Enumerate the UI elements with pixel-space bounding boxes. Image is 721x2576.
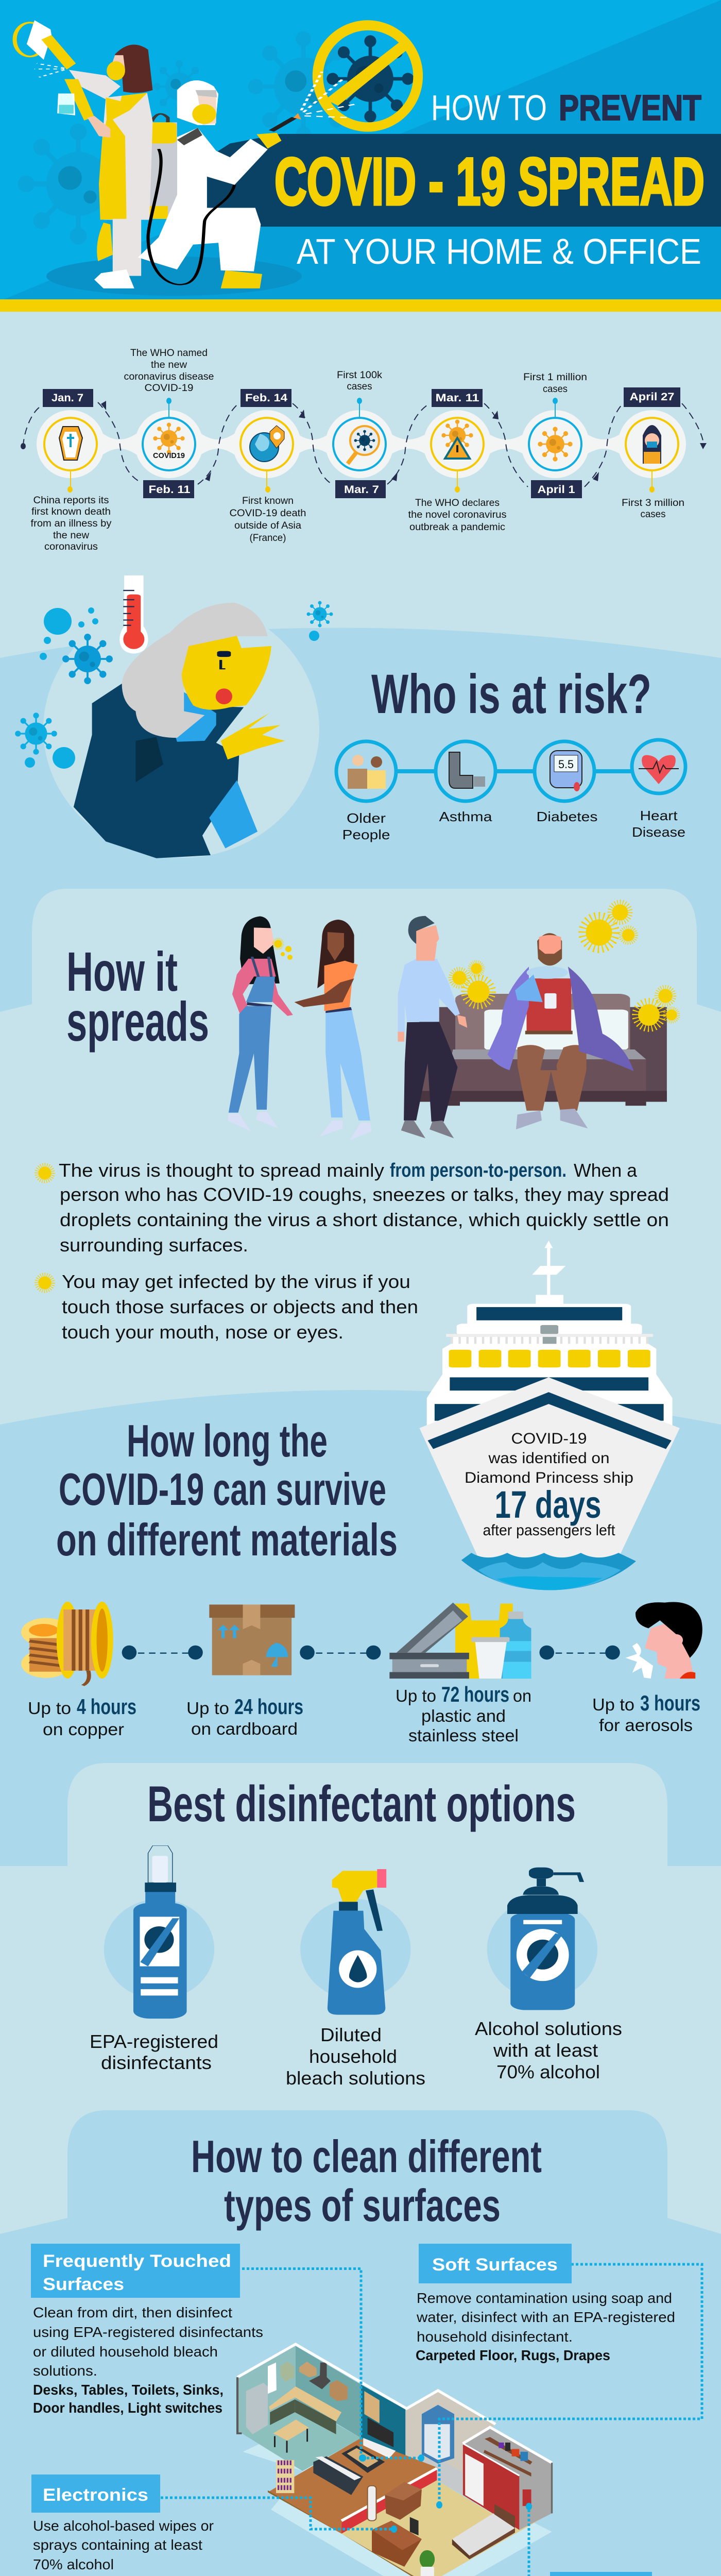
icon: covid19 virus: COVID19 bbox=[153, 451, 185, 460]
date labels: Jan. 7 bbox=[52, 392, 83, 404]
materials row text: Up to bbox=[28, 1699, 71, 1718]
event descriptions: First 100k bbox=[337, 370, 383, 381]
icon: inhaler bbox=[436, 741, 495, 801]
materials row text: 72 hours bbox=[441, 1682, 509, 1706]
event descriptions: first known death bbox=[31, 506, 111, 517]
event descriptions: cases bbox=[347, 381, 372, 392]
timeline ribbon bbox=[37, 410, 686, 478]
risk labels bbox=[342, 808, 685, 842]
date labels: Mar. 7 bbox=[344, 484, 379, 496]
materials row text: 4 hours bbox=[77, 1694, 136, 1719]
icon: coffin bbox=[59, 427, 82, 460]
callout: electronics bbox=[31, 2475, 245, 2576]
callout: electronics: Electronics bbox=[43, 2485, 148, 2505]
paragraph: spread from person to person: person who has COVID-19 coughs, sneezes or talks, they may spread bbox=[60, 1184, 669, 1205]
paragraph: touching surfaces: touch your mouth, nose or eyes. bbox=[62, 1321, 344, 1343]
illustration: people and sofa bbox=[228, 916, 667, 1140]
ship text: 17 days bbox=[494, 1483, 602, 1526]
disinfectant labels: 70% alcohol bbox=[496, 2061, 600, 2082]
callout: electronics: Use alcohol-based wipes or bbox=[33, 2518, 214, 2534]
event descriptions: COVID-19 bbox=[144, 383, 194, 394]
event descriptions: the new bbox=[151, 360, 187, 370]
date labels: Feb. 11 bbox=[148, 484, 191, 496]
materials row text: 3 hours bbox=[640, 1691, 700, 1715]
heading: how to clean: types of surfaces bbox=[224, 2180, 501, 2231]
event descriptions: the new bbox=[53, 530, 89, 541]
man standing with cap bbox=[398, 916, 467, 1138]
callout: frequently touched surfaces: Clean from dirt, then disinfect bbox=[33, 2304, 232, 2320]
disinfectant labels: Diluted bbox=[320, 2024, 382, 2045]
callout: electronics: sprays containing at least bbox=[33, 2537, 202, 2553]
date labels: Mar. 11 bbox=[436, 392, 479, 404]
disinfectant labels: disinfectants bbox=[101, 2052, 212, 2073]
event descriptions: First 3 million bbox=[622, 498, 684, 509]
icon: person sneezing bbox=[625, 1602, 702, 1679]
heading: how long: COVID-19 can survive bbox=[59, 1464, 386, 1515]
date labels: April 1 bbox=[538, 484, 575, 496]
materials row text: on copper bbox=[43, 1720, 124, 1739]
woman in overalls bbox=[228, 917, 293, 1131]
event descriptions: (France) bbox=[249, 533, 286, 544]
heading: how to clean: How to clean different bbox=[191, 2131, 542, 2182]
connectors bbox=[122, 1646, 620, 1659]
materials row text bbox=[28, 1682, 700, 1745]
illustration: disinfectant bottles bbox=[104, 1845, 597, 2019]
ship text: COVID-19 bbox=[511, 1430, 587, 1447]
icon: magnifier bbox=[348, 426, 379, 464]
disinfectant labels: Alcohol solutions bbox=[475, 2018, 622, 2039]
materials row text: stainless steel bbox=[408, 1726, 519, 1745]
event descriptions: China reports its bbox=[33, 495, 109, 506]
event descriptions bbox=[31, 348, 684, 552]
rings and stems bbox=[44, 398, 678, 493]
paragraph: spread from person to person: from person-to-person. bbox=[390, 1160, 566, 1181]
woman wiping bbox=[15, 20, 152, 289]
callout: laundry bbox=[409, 2572, 707, 2576]
risk labels: Disease bbox=[632, 824, 685, 840]
icon: woman with mask bbox=[643, 425, 661, 464]
date labels: Feb. 14 bbox=[245, 392, 287, 404]
callout: electronics: 70% alcohol bbox=[33, 2556, 114, 2572]
risk labels: People bbox=[342, 827, 390, 842]
heading: how it spreads bbox=[66, 940, 209, 1053]
callout: frequently touched surfaces: Frequently Touched bbox=[43, 2251, 231, 2271]
callout: frequently touched surfaces: Desks, Tables, Toilets, Sinks, bbox=[33, 2382, 224, 2398]
sanitizing workers illustration bbox=[15, 20, 356, 289]
callout: soft surfaces: Soft Surfaces bbox=[432, 2255, 558, 2275]
heading: how to clean bbox=[191, 2131, 542, 2231]
event descriptions: outbreak a pandemic bbox=[409, 522, 505, 533]
callout connector lines bbox=[161, 2264, 702, 2576]
kneeling man in protective suit bbox=[138, 72, 356, 289]
woman in orange shirt bbox=[295, 920, 372, 1140]
materials row text: on cardboard bbox=[191, 1719, 298, 1738]
icon: glucose meter bbox=[535, 741, 594, 801]
title: how to prevent bbox=[431, 88, 701, 128]
materials row text: Up to bbox=[592, 1695, 634, 1714]
bottle: diluted bleach bbox=[328, 1869, 386, 2015]
risk labels: Diabetes bbox=[537, 809, 597, 824]
callout: soft surfaces: Carpeted Floor, Rugs, Drapes bbox=[416, 2347, 610, 2363]
event descriptions: the novel coronavirus bbox=[408, 510, 507, 520]
date boxes bbox=[43, 387, 680, 498]
event descriptions: coronavirus disease bbox=[124, 371, 214, 382]
callout: frequently touched surfaces: using EPA-registered disinfectants bbox=[33, 2324, 263, 2340]
icon: heart bbox=[632, 740, 685, 793]
illustration: cruise ship bbox=[419, 1241, 680, 1558]
materials row text: Up to bbox=[186, 1699, 229, 1718]
yellow virus particles bbox=[273, 902, 678, 1029]
disinfectant labels: with at least bbox=[493, 2040, 598, 2061]
event descriptions: cases bbox=[543, 384, 568, 395]
bottle: alcohol pump bbox=[507, 1868, 584, 2010]
callout: frequently touched surfaces: Surfaces bbox=[43, 2275, 124, 2294]
heading: how it spreads: spreads bbox=[66, 990, 209, 1053]
icon: orange virus bbox=[538, 427, 573, 462]
disinfectant labels: EPA-registered bbox=[90, 2031, 218, 2052]
ship text: was identified on bbox=[488, 1450, 610, 1467]
disinfectant labels: household bbox=[309, 2046, 397, 2067]
event descriptions: First 1 million bbox=[523, 372, 587, 383]
icon: globe and skull bbox=[250, 426, 284, 462]
timeline bbox=[21, 348, 707, 552]
how it spreads section bbox=[37, 902, 678, 1343]
event descriptions: First known bbox=[242, 496, 294, 506]
event descriptions: outside of Asia bbox=[234, 520, 301, 531]
paragraph: touching surfaces bbox=[37, 1271, 418, 1343]
bottle: EPA disinfectant bbox=[133, 1845, 187, 2019]
paragraph: spread from person to person: When a bbox=[574, 1160, 638, 1181]
icon: thermometer bbox=[119, 575, 148, 654]
event descriptions: cases bbox=[641, 509, 665, 520]
icon: covid19 virus bbox=[153, 422, 185, 460]
disinfectant labels bbox=[90, 2018, 622, 2089]
paragraph: touching surfaces: touch those surfaces or objects and then bbox=[62, 1296, 418, 1317]
event descriptions: The WHO named bbox=[130, 348, 208, 359]
dashed arrows bbox=[21, 401, 707, 487]
callout: frequently touched surfaces bbox=[31, 2244, 263, 2416]
materials row text: plastic and bbox=[421, 1706, 506, 1725]
heading: how it spreads: How it bbox=[66, 940, 178, 1003]
paragraph: spread from person to person: droplets containing the virus a short distance, which quickly settle on bbox=[60, 1209, 669, 1230]
risk icons row bbox=[336, 740, 685, 801]
paragraph: spread from person to person bbox=[37, 1160, 669, 1256]
materials row text: 24 hours bbox=[234, 1694, 303, 1719]
yellow stripe bbox=[0, 299, 721, 312]
paragraph: spread from person to person: surrounding surfaces. bbox=[60, 1234, 248, 1256]
event descriptions: from an illness by bbox=[31, 518, 112, 529]
event descriptions: coronavirus bbox=[44, 541, 98, 552]
heading: how long: How long the bbox=[127, 1415, 328, 1466]
disinfectant labels: bleach solutions bbox=[286, 2067, 425, 2089]
icon: glucose meter: 5.5 bbox=[558, 758, 574, 771]
floor shadow bbox=[46, 257, 302, 296]
how to clean section bbox=[31, 2131, 707, 2576]
virus particles bbox=[15, 601, 333, 769]
icon: cardboard box bbox=[209, 1604, 295, 1675]
header banner bbox=[0, 0, 721, 312]
sprayer tank bbox=[140, 114, 177, 219]
icon: plastic and steel bbox=[389, 1603, 531, 1679]
best disinfectant options section bbox=[90, 1775, 622, 2089]
date labels bbox=[52, 391, 675, 496]
event descriptions: COVID-19 death bbox=[230, 508, 306, 519]
event descriptions: The WHO declares bbox=[415, 498, 500, 509]
title band bbox=[207, 134, 721, 227]
callout: frequently touched surfaces: or diluted household bleach bbox=[33, 2344, 218, 2360]
risk labels: Asthma bbox=[439, 809, 492, 824]
paragraph: touching surfaces: You may get infected by the virus if you bbox=[62, 1271, 410, 1292]
callout: soft surfaces: water, disinfect with an EPA-registered bbox=[416, 2309, 675, 2325]
icon: copper spool bbox=[21, 1602, 113, 1686]
icon: warning virus bbox=[441, 419, 473, 459]
faded background viruses bbox=[18, 31, 358, 244]
risk labels: Older bbox=[347, 810, 386, 826]
callout: soft surfaces bbox=[416, 2244, 675, 2363]
materials row text: on bbox=[513, 1686, 531, 1705]
date labels: April 27 bbox=[629, 391, 675, 403]
heading: how long: on different materials bbox=[56, 1514, 398, 1565]
roof outline bbox=[237, 2344, 495, 2424]
title: how to prevent: HOW TO bbox=[431, 88, 547, 128]
sofa bbox=[419, 994, 667, 1106]
ship text: after passengers left bbox=[483, 1522, 615, 1539]
illustration: coughing woman bbox=[74, 603, 285, 858]
materials row icons bbox=[21, 1602, 702, 1686]
furniture bbox=[246, 2362, 531, 2576]
callout: frequently touched surfaces: solutions. bbox=[33, 2363, 97, 2379]
no-virus sign bbox=[313, 20, 423, 132]
callout: frequently touched surfaces: Door handles, Light switches bbox=[33, 2400, 222, 2416]
who is at risk section bbox=[15, 575, 685, 858]
how long section bbox=[21, 1241, 702, 1745]
callout: soft surfaces: Remove contamination using soap and bbox=[417, 2290, 672, 2306]
icon: older people bbox=[336, 741, 396, 801]
ship text: Diamond Princess ship bbox=[465, 1469, 633, 1486]
callout: soft surfaces: household disinfectant. bbox=[417, 2329, 573, 2345]
ship text bbox=[465, 1430, 633, 1539]
materials row text: for aerosols bbox=[599, 1716, 693, 1735]
illustration: isometric apartment bbox=[237, 2344, 552, 2576]
materials row text: Up to bbox=[396, 1686, 436, 1705]
heading: how long bbox=[56, 1415, 398, 1565]
sick man under blanket bbox=[488, 933, 634, 1129]
illustration: ship waves bbox=[461, 1553, 636, 1590]
paragraph: spread from person to person: The virus is thought to spread mainly bbox=[59, 1160, 384, 1181]
risk labels: Heart bbox=[640, 808, 678, 823]
